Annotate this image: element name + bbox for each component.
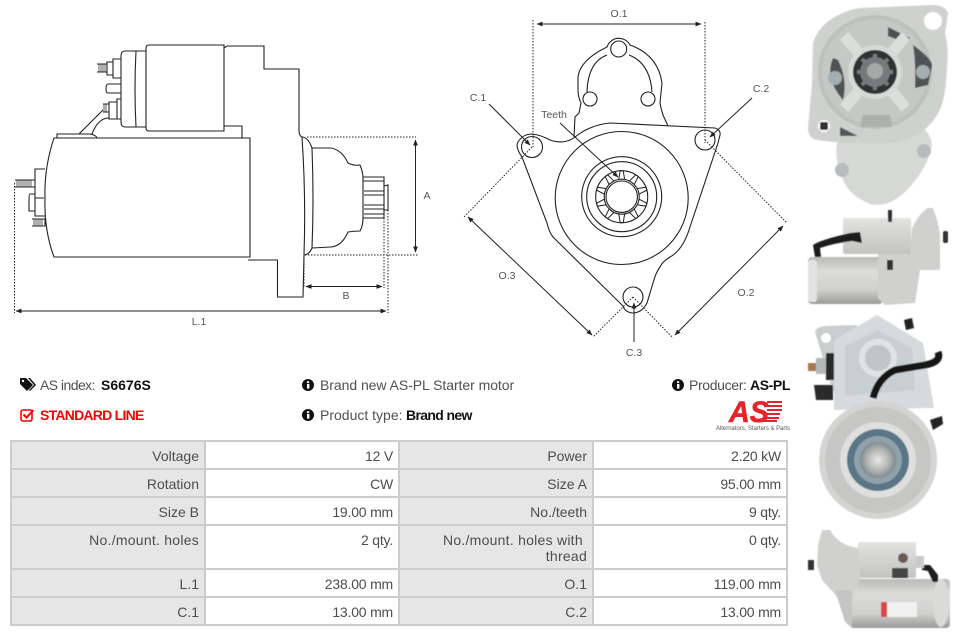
product description: Brand new AS-PL Starter motor (320, 377, 514, 393)
dimension labels on front view: O.2 (738, 287, 755, 299)
dimension labels on front view: O.1 (611, 8, 628, 20)
motor body (45, 138, 250, 257)
specification table: Size A (547, 476, 587, 492)
dimension lines on front view (464, 20, 787, 342)
specification table: 9 qty. (749, 504, 781, 520)
producer (689, 377, 790, 393)
icon: checkbox (20, 409, 34, 422)
standard line: STANDARD LINE (40, 407, 144, 423)
specification table: thread (546, 548, 587, 564)
icon: tags (20, 378, 36, 391)
text: AS-PL (750, 377, 790, 393)
AS index (40, 377, 151, 393)
specification table: C.2 (565, 604, 587, 620)
product type: Product type: (320, 407, 402, 423)
specification table: 2 qty. (361, 532, 393, 548)
dimension labels on front view: Teeth (541, 109, 567, 121)
photo: mounting flange view (808, 5, 948, 205)
terminals and studs (15, 59, 121, 226)
specification table: Size B (159, 504, 199, 520)
icon: info 1 (302, 379, 314, 391)
dimension labels on front view (470, 8, 769, 359)
nose and pinion (312, 148, 388, 248)
dimension labels on side view: L.1 (192, 316, 206, 328)
specification table: C.1 (177, 604, 199, 620)
specification table: 13.00 mm (720, 604, 781, 620)
flange outline (517, 123, 720, 313)
specification table: O.1 (564, 576, 587, 592)
specification table: Power (547, 448, 587, 464)
drive housing (224, 46, 313, 297)
specification table: 119.00 mm (714, 576, 781, 592)
dimension labels on front view: O.3 (499, 270, 516, 282)
specification table: No./mount. holes with (443, 532, 583, 548)
stud hatching (17, 64, 106, 226)
central rings (555, 132, 688, 264)
AS index: AS index: (40, 377, 95, 393)
icon: info 2 (302, 409, 314, 421)
specification table: 0 qty. (749, 532, 781, 548)
specification table: 12 V (365, 448, 393, 464)
specification table: CW (370, 476, 393, 492)
photo: side view facing left (808, 530, 950, 628)
specification table: 2.20 kW (731, 448, 781, 464)
AS logo: Alternators, Starters & Parts (716, 426, 790, 432)
dimension labels on front view: C.1 (470, 92, 486, 104)
pinion teeth (596, 171, 647, 223)
solenoid (121, 45, 242, 138)
product type (320, 407, 472, 423)
front view technical drawing (517, 38, 720, 313)
specification table: 95.00 mm (720, 476, 781, 492)
specification table: Rotation (147, 476, 199, 492)
dimension labels on side view: A (423, 190, 431, 202)
photo: side view facing right (808, 208, 948, 305)
dimension lines on side view (14, 137, 418, 313)
specification table: L.1 (180, 576, 199, 592)
specification table (10, 440, 788, 626)
dimension labels on front view: C.2 (753, 83, 769, 95)
icon: info 3 (672, 379, 684, 391)
specification table: No./teeth (530, 504, 587, 520)
dimension labels on side view (192, 190, 431, 328)
AS logo: AS (728, 396, 769, 429)
specification table: 19.00 mm (332, 504, 393, 520)
photo: rear end view (808, 315, 943, 519)
specification table: No./mount. holes (89, 532, 199, 548)
side view technical drawing (15, 45, 388, 297)
AS logo (716, 396, 790, 432)
text: S6676S (101, 377, 151, 393)
top lug (574, 38, 668, 137)
specification table: 13.00 mm (332, 604, 393, 620)
text: Brand new (406, 407, 472, 423)
specification table: 238.00 mm (325, 576, 393, 592)
producer: Producer: (689, 377, 747, 393)
dimension labels on front view: C.3 (626, 347, 642, 359)
specification table: Voltage (152, 448, 199, 464)
dimension labels on side view: B (342, 290, 350, 302)
